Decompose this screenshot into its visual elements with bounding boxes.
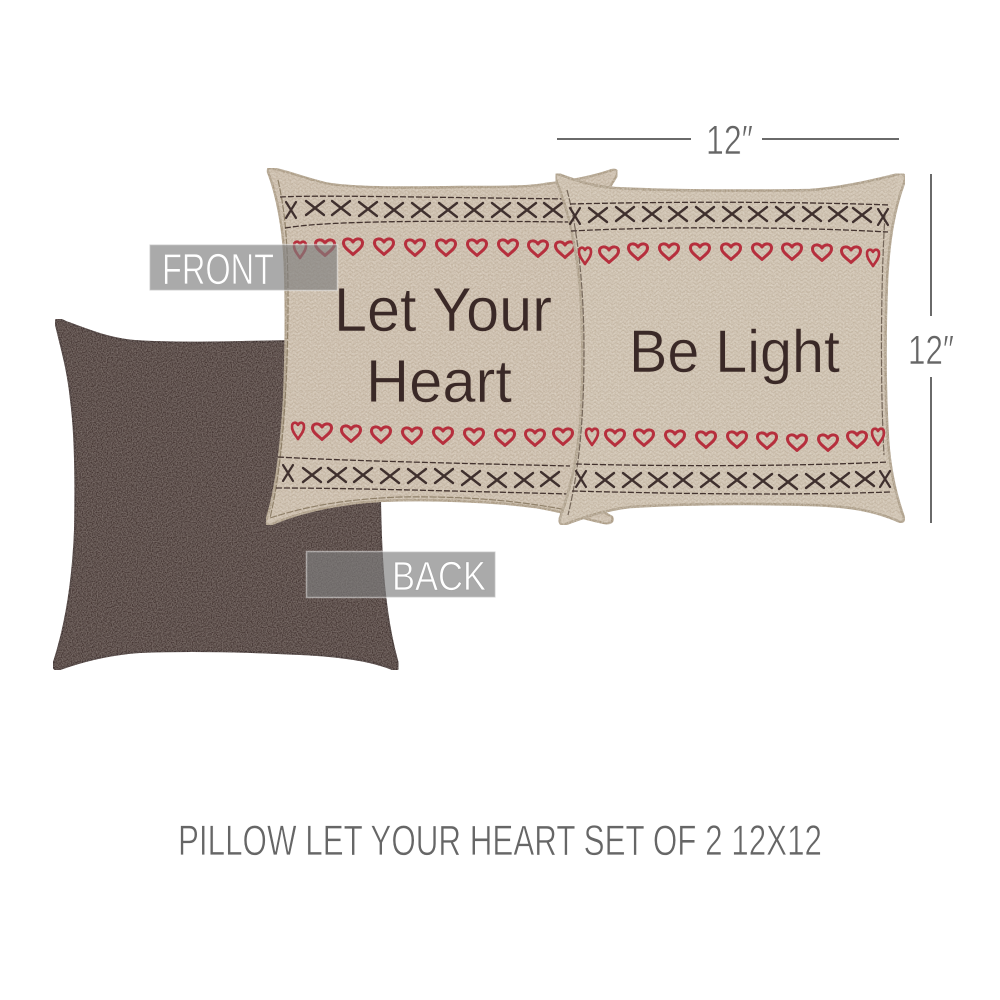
dimension: height 12 inches: 12″ (908, 327, 954, 373)
label: BACK: BACK (392, 553, 486, 599)
pillow body (556, 174, 905, 525)
pillow body (266, 168, 617, 525)
embroidered text: Let Your Heart (334, 276, 552, 415)
embroidered text: Let Your Heart: Heart (366, 348, 512, 415)
label: FRONT: FRONT (162, 245, 274, 294)
hearts, bottom row (586, 429, 884, 450)
hearts, bottom row (292, 423, 572, 446)
hearts, top row (294, 239, 574, 258)
hearts, top row (579, 244, 879, 266)
pillow: front side, Let Your Heart (266, 168, 617, 525)
herringbone weave (556, 174, 903, 524)
pillow: back side (dark wool) (53, 319, 398, 670)
seam (270, 180, 590, 518)
dimension: width 12 inches: 12″ (706, 117, 753, 163)
cross stitches, bottom row (283, 465, 559, 487)
herringbone weave (268, 168, 612, 524)
embroidered text: Be Light: Be Light (629, 318, 840, 385)
cross stitches, top row (286, 201, 562, 218)
pillow: front side, Be Light (556, 174, 905, 525)
stitched lines, top band (280, 196, 570, 228)
cross stitches, top row (570, 207, 888, 225)
stitched lines, bottom band (572, 462, 890, 494)
stitched lines, bottom band (276, 457, 570, 494)
stitched lines, top band (570, 202, 890, 232)
seam (567, 190, 885, 515)
label: BACK (306, 552, 496, 599)
embroidered text: Let Your Heart: Let Your (334, 276, 552, 345)
cross stitches, bottom row (576, 471, 890, 489)
